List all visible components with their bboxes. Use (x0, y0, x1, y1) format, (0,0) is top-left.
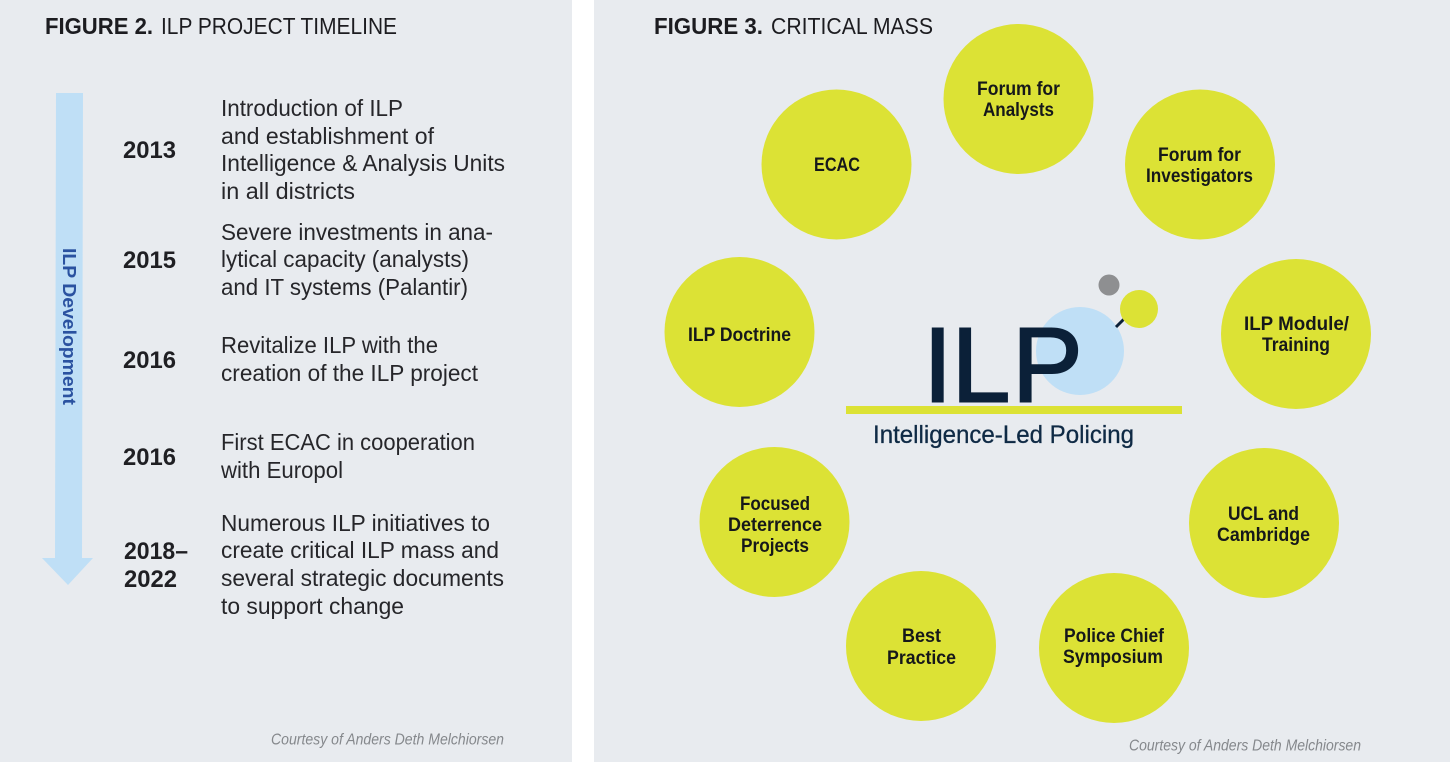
heading: figure 2: ILP PROJECT TIMELINE (161, 13, 397, 39)
circle: Police Chief Symposium: Symposium (1063, 647, 1163, 668)
timeline entry: 2016 ECAC: 2016 (123, 444, 176, 471)
circle: ECAC: ECAC (814, 155, 860, 176)
circle: Focused Deterrence Projects: Deterrence (728, 515, 822, 536)
timeline entry: 2013: in all districts (221, 178, 355, 204)
timeline entry: 2013: and establishment of (221, 123, 435, 149)
logo: ILP Intelligence-Led Policing (846, 274, 1182, 449)
circle: ILP Doctrine (664, 257, 814, 407)
timeline entry: 2013: Intelligence & Analysis Units (221, 150, 505, 176)
timeline entry: 2013 (123, 95, 505, 204)
circle: Police Chief Symposium (1039, 573, 1189, 723)
circle: Best Practice: Practice (887, 648, 956, 669)
timeline entry: 2018-2022: create critical ILP mass and (221, 537, 499, 563)
timeline entry: 2016 ILP project: Revitalize ILP with the (221, 332, 438, 358)
timeline entry: 2018-2022: to support change (221, 593, 404, 619)
circle: Forum for Analysts: Analysts (983, 100, 1054, 121)
arrow: ILP development: ILP Development (59, 248, 79, 405)
circle: ILP Module/Training (1221, 259, 1371, 409)
timeline entry: 2015: 2015 (123, 247, 176, 274)
timeline entry: 2016 ILP project: 2016 (123, 347, 176, 374)
heading: figure 2 (45, 13, 397, 39)
timeline entry: 2013: Introduction of ILP (221, 95, 403, 121)
circle: Focused Deterrence Projects: Focused (740, 494, 810, 515)
circle: Best Practice: Best (902, 626, 942, 647)
credit: figure 3: Courtesy of Anders Deth Melchiorsen (1129, 738, 1361, 754)
circle: Forum for Analysts (944, 24, 1094, 174)
heading: figure 3: CRITICAL MASS (771, 13, 933, 39)
circle: ILP Module/Training: Training (1262, 335, 1330, 356)
credit: figure 2: Courtesy of Anders Deth Melchiorsen (271, 732, 504, 748)
circle: ILP Doctrine: ILP Doctrine (688, 325, 791, 346)
timeline entry: 2015: and IT systems (Palantir) (221, 274, 468, 300)
circle: Focused Deterrence Projects (700, 447, 850, 597)
timeline entry: 2015 (123, 219, 493, 300)
timeline entry: 2015: lytical capacity (analysts) (221, 246, 469, 272)
circle: ECAC (762, 90, 912, 240)
timeline entry: 2016 ILP project (123, 332, 479, 386)
timeline entry: 2015: Severe investments in ana- (221, 219, 493, 245)
panel: figure 3 critical mass (594, 0, 1450, 762)
logo: ILP Intelligence-Led Policing: ILP (923, 306, 1083, 424)
logo: ILP Intelligence-Led Policing: Intelligence-Led Policing (873, 421, 1134, 449)
arrow: ILP development (42, 93, 93, 585)
timeline entry: 2018-2022 (124, 510, 504, 619)
timeline entry: 2016 ECAC: First ECAC in cooperation (221, 429, 475, 455)
circle: ILP Module/Training: ILP Module/ (1244, 314, 1350, 335)
circle: UCL and Cambridge: Cambridge (1217, 525, 1310, 546)
circle: Forum for Investigators (1125, 90, 1275, 240)
circle: UCL and Cambridge (1189, 448, 1339, 598)
circle: Forum for Investigators: Forum for (1158, 145, 1242, 166)
circle: Focused Deterrence Projects: Projects (741, 536, 809, 557)
timeline entry: 2018-2022: 2022 (124, 566, 177, 593)
timeline entry: 2018-2022: several strategic documents (221, 565, 504, 591)
heading: figure 3 (654, 13, 933, 39)
heading: figure 2: FIGURE 2. (45, 13, 153, 39)
timeline entry: 2013: 2013 (123, 137, 176, 164)
timeline entry: 2018-2022: 2018– (124, 538, 188, 565)
timeline entry: 2016 ILP project: creation of the ILP project (221, 360, 479, 386)
timeline entry: 2016 ECAC (123, 429, 475, 483)
timeline entry: 2016 ECAC: with Europol (220, 457, 343, 483)
heading: figure 3: FIGURE 3. (654, 13, 763, 39)
circle: Police Chief Symposium: Police Chief (1064, 626, 1165, 647)
circle: Forum for Analysts: Forum for (977, 79, 1061, 100)
circle: UCL and Cambridge: UCL and (1228, 504, 1299, 525)
timeline entry: 2018-2022: Numerous ILP initiatives to (221, 510, 490, 536)
circle: Forum for Investigators: Investigators (1146, 166, 1253, 187)
circle: Best Practice (846, 571, 996, 721)
panel: figure 2 timeline (0, 0, 572, 762)
